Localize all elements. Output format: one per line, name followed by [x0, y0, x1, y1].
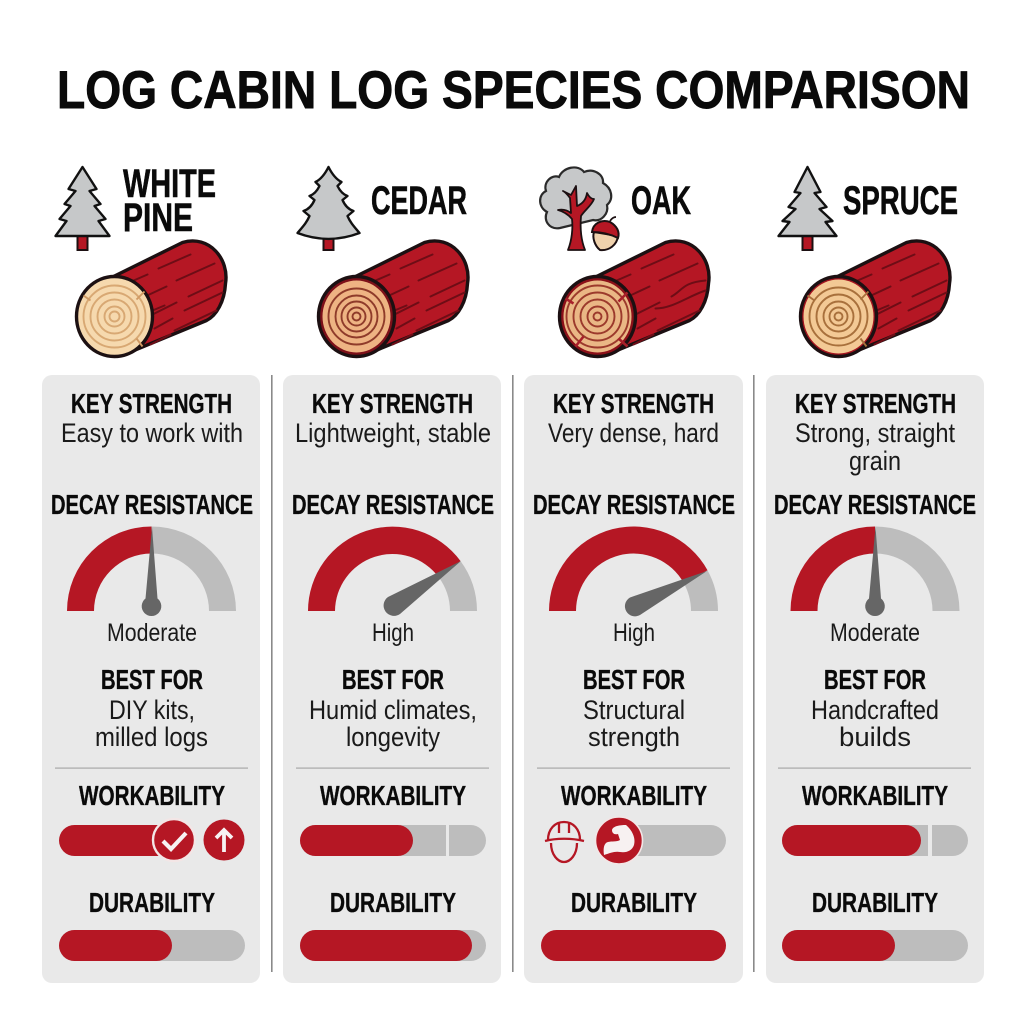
decay resistance heading: DECAY RESISTANCE: [533, 489, 735, 520]
gauge: high: [308, 527, 477, 616]
durability bar: [300, 930, 486, 961]
decay resistance heading: DECAY RESISTANCE: [292, 489, 494, 520]
durability heading: DURABILITY: [571, 887, 697, 918]
species name: white pine: WHITE: [123, 162, 216, 206]
key strength: KEY STRENGTH: [553, 388, 714, 419]
best for: BEST FOR: [583, 664, 685, 695]
gauge label: High: [613, 619, 655, 647]
panel: white pine: [42, 375, 260, 983]
panel: oak: [524, 375, 743, 983]
best for: Handcrafted: [811, 695, 939, 725]
key strength: Easy to work with: [61, 418, 243, 448]
gauge: moderate: [67, 526, 236, 616]
key strength: Very dense, hard: [548, 418, 719, 448]
durability heading: DURABILITY: [812, 887, 938, 918]
durability bar: [59, 930, 245, 961]
best for: longevity: [346, 722, 440, 752]
icon: spruce log: [800, 241, 950, 356]
best for: DIY kits,: [109, 695, 195, 725]
column: spruce: [766, 167, 984, 983]
icon: cedar log: [318, 241, 468, 356]
gauge label: Moderate: [107, 619, 197, 647]
icon: oak log: [560, 241, 709, 356]
key strength: Lightweight, stable: [295, 418, 491, 448]
workability bar with icons: [59, 819, 244, 861]
best for: strength: [588, 722, 680, 752]
icon: spruce tree: [778, 167, 836, 250]
key strength: [795, 388, 956, 476]
key strength: KEY STRENGTH: [71, 388, 232, 419]
key strength: [548, 388, 719, 448]
decay resistance heading: DECAY RESISTANCE: [51, 489, 253, 520]
key strength: grain: [849, 446, 901, 476]
icon: pine tree: [56, 167, 110, 250]
workability heading: WORKABILITY: [802, 780, 948, 811]
icon: white pine log: [76, 241, 226, 356]
species name: spruce: SPRUCE: [843, 179, 958, 223]
best for: milled logs: [95, 722, 208, 752]
workability bar: [300, 825, 486, 856]
panel: cedar: [283, 375, 501, 983]
species name: white pine: PINE: [123, 196, 193, 240]
best for: [811, 664, 939, 752]
column: cedar: [283, 167, 501, 983]
icon: oak tree and acorn: [540, 167, 619, 250]
gauge: high: [549, 526, 718, 616]
best for: [309, 664, 477, 752]
gauge: moderate: [790, 526, 960, 616]
workability bar: [782, 825, 968, 856]
icon: cedar tree: [298, 167, 360, 250]
gauge label: Moderate: [830, 619, 920, 647]
workability heading: WORKABILITY: [561, 780, 707, 811]
best for: BEST FOR: [342, 664, 444, 695]
species name: white pine: [123, 162, 216, 240]
durability heading: DURABILITY: [330, 887, 456, 918]
species name: cedar: CEDAR: [371, 179, 467, 223]
workability heading: WORKABILITY: [79, 780, 225, 811]
key strength: [295, 388, 491, 448]
workability bar with icons: [545, 817, 726, 864]
panel: spruce: [766, 375, 984, 983]
column: oak: [524, 167, 743, 983]
workability heading: WORKABILITY: [320, 780, 466, 811]
gauge label: High: [372, 619, 414, 647]
best for: Humid climates,: [309, 695, 477, 725]
durability bar: [541, 930, 726, 961]
durability heading: DURABILITY: [89, 887, 215, 918]
column: white pine: [42, 162, 260, 983]
durability bar: [782, 930, 968, 961]
best for: builds: [839, 722, 911, 752]
best for: Structural: [583, 695, 685, 725]
key strength: KEY STRENGTH: [312, 388, 473, 419]
best for: BEST FOR: [824, 664, 926, 695]
best for: [95, 664, 208, 752]
best for: [583, 664, 685, 752]
best for: BEST FOR: [101, 664, 203, 695]
key strength: KEY STRENGTH: [795, 388, 956, 419]
key strength: [61, 388, 243, 448]
key strength: Strong, straight: [795, 418, 955, 448]
species name: oak: OAK: [631, 179, 691, 223]
